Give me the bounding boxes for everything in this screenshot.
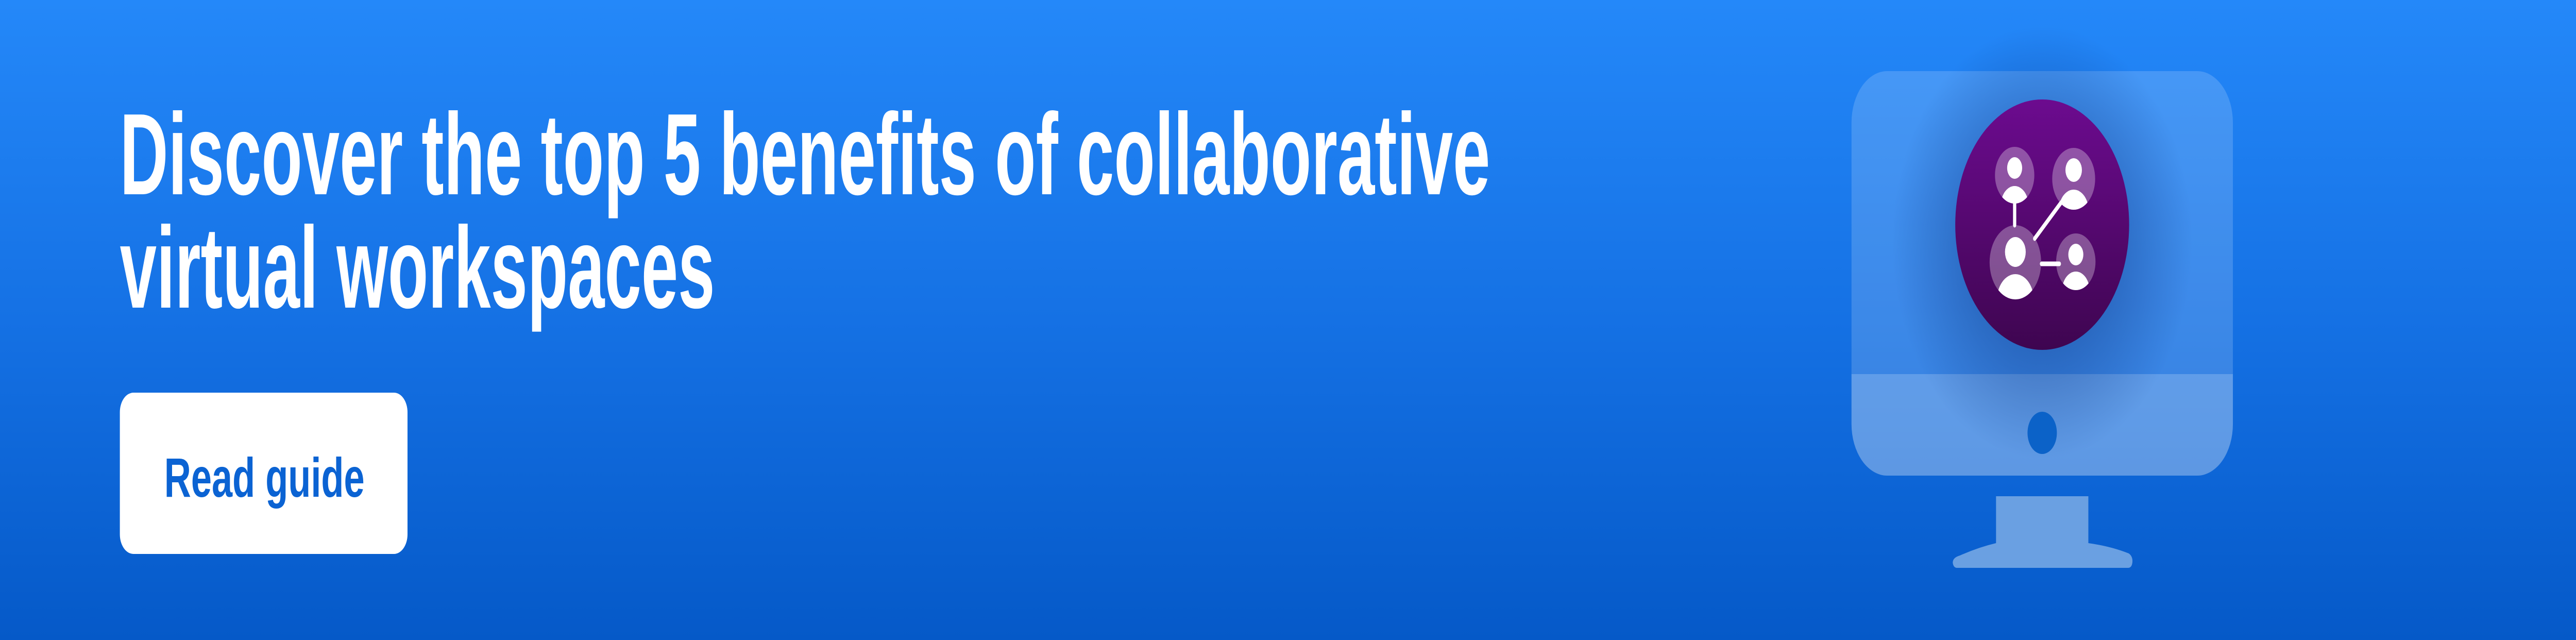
icon: purple circle (1955, 99, 2129, 350)
button: Read guide (120, 393, 408, 554)
button: Read guide: Read guide (164, 446, 365, 509)
title (120, 90, 1490, 333)
title: virtual workspaces (120, 204, 715, 333)
icon: monitor with collaboration network (1852, 26, 2233, 568)
title: Discover the top 5 benefits of collaborative (120, 90, 1490, 220)
